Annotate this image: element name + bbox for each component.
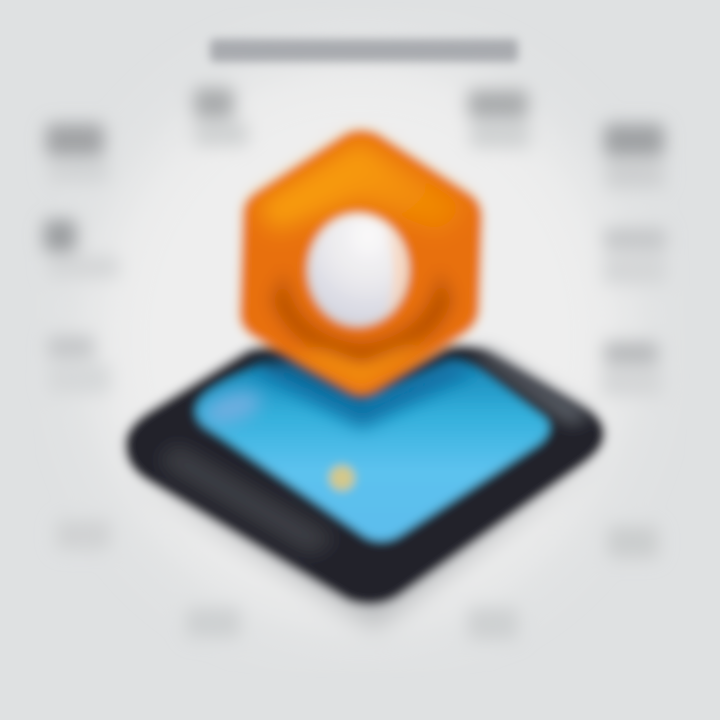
label: upper right inner (468, 90, 530, 148)
hexagon dark inner ring (272, 270, 452, 368)
label: bottom left (56, 520, 110, 550)
device lower-left bevel (160, 446, 335, 552)
device top rim highlight (470, 350, 592, 424)
label: lower right (602, 342, 662, 396)
background glow (90, 55, 630, 625)
label: middle left (44, 220, 118, 278)
hexagon bottom tip (290, 345, 432, 386)
screen dark reflection (248, 360, 475, 428)
white sphere (307, 213, 409, 327)
screen button (329, 465, 355, 491)
hexagon top face (256, 140, 466, 232)
label: middle right (604, 228, 666, 284)
icon: orange hexagonal cube (240, 130, 482, 395)
icon: tablet device (126, 345, 604, 604)
device body (126, 345, 604, 604)
shadow under device (130, 450, 610, 630)
title (210, 39, 518, 62)
label: lower left (48, 336, 110, 394)
blurred scene (44, 39, 666, 640)
label: upper far left (46, 124, 108, 182)
label: upper left inner (194, 88, 248, 146)
screen light patch left (199, 385, 265, 431)
screen (196, 362, 550, 542)
label: bottom right (608, 526, 658, 558)
hexagon body (240, 130, 482, 395)
label: upper far right (604, 124, 664, 188)
sphere peach edge (386, 228, 404, 316)
label: bottom center right (468, 608, 518, 640)
label: bottom center left (186, 608, 240, 638)
